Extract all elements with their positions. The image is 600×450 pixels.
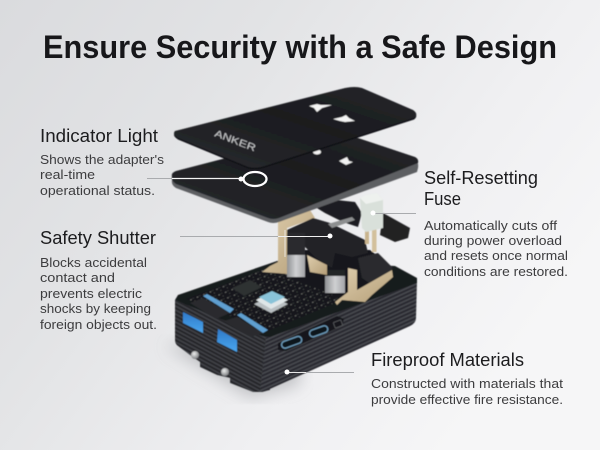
dark column [287, 233, 305, 257]
text block: safety shutter: foreign objects out. [40, 318, 157, 332]
text block: fireproof materials [371, 350, 564, 407]
usb board recess left [190, 298, 230, 319]
shutter highlight [328, 217, 355, 228]
usb-c port two [309, 325, 329, 338]
text block: indicator light: operational status. [40, 184, 155, 198]
text block: safety shutter: Blocks accidental [40, 256, 147, 270]
lower plate [172, 131, 418, 223]
anker logo: ANKER [213, 128, 257, 154]
text block: safety shutter: Safety Shutter [40, 228, 156, 248]
callout: indicator light [147, 172, 266, 186]
top plate socket slot two [333, 115, 355, 122]
top plate socket slot one [309, 104, 332, 112]
usb contact strip right [237, 313, 268, 333]
lower plate socket holes [313, 150, 321, 154]
callout: safety shutter [180, 230, 332, 257]
text block: self-resetting fuse [424, 168, 568, 279]
indicator window [333, 320, 343, 328]
adapter base housing [175, 260, 417, 392]
title: Ensure Security with a Safe Design [43, 29, 557, 65]
usb contact strip left [203, 294, 234, 313]
metal foot one [191, 351, 199, 359]
fuse pins [365, 226, 369, 244]
tan frame right [335, 268, 393, 305]
lower dark backing [287, 250, 393, 300]
text block: self-resetting fuse: Self-Resetting [424, 168, 538, 188]
cooling chip stack [254, 291, 288, 313]
fuse body [360, 193, 383, 232]
text block: indicator light: real-time [40, 168, 95, 182]
safety shutter mechanism [262, 198, 393, 305]
text block: safety shutter: shocks by keeping [40, 302, 151, 316]
usb-c port panel [278, 316, 344, 351]
text block: fireproof materials: Constructed with materials that [371, 377, 564, 391]
text block: indicator light [40, 126, 164, 198]
text block: fireproof materials: provide effective fire resistance. [371, 393, 563, 407]
upper clips [312, 198, 362, 227]
drop shadow under adapter [165, 340, 300, 398]
circuit board [186, 264, 350, 331]
dark shutter block [287, 218, 368, 268]
usb-c port one [281, 335, 303, 349]
fuse [360, 193, 410, 252]
text block: self-resetting fuse: and resets once normal [424, 249, 568, 263]
text block: indicator light: Shows the adapter's [40, 153, 164, 167]
left clip under plate [262, 206, 300, 222]
tan frame left [262, 210, 315, 274]
text block: self-resetting fuse: Automatically cuts off [424, 219, 558, 233]
callout: fireproof materials [284, 370, 354, 374]
dark connector [380, 213, 410, 242]
callout: fuse [370, 210, 416, 216]
left ribbed face [175, 300, 270, 392]
text block: self-resetting fuse: during power overload [424, 234, 562, 248]
metal contact left [287, 255, 305, 277]
text block: safety shutter [40, 228, 157, 332]
usb-a port right [217, 329, 237, 352]
text block: safety shutter: contact and [40, 271, 115, 285]
text block: safety shutter: prevents electric [40, 287, 142, 301]
text block: self-resetting fuse: Fuse [424, 189, 461, 209]
housing rim and interior [175, 260, 417, 337]
tan clip centre [307, 255, 327, 275]
top plate [174, 87, 416, 169]
right ribbed face [260, 280, 417, 392]
metal contact right [325, 270, 345, 293]
usb board recess right [224, 317, 263, 337]
text block: indicator light: Indicator Light [40, 126, 158, 146]
text block: self-resetting fuse: conditions are restored. [424, 265, 568, 279]
text block: fireproof materials: Fireproof Materials [371, 350, 524, 370]
dark block right [358, 253, 393, 287]
metal foot two [221, 368, 229, 376]
usb-a port left [183, 312, 203, 333]
adapter exploded illustration [165, 87, 418, 398]
dark chip [232, 280, 262, 296]
